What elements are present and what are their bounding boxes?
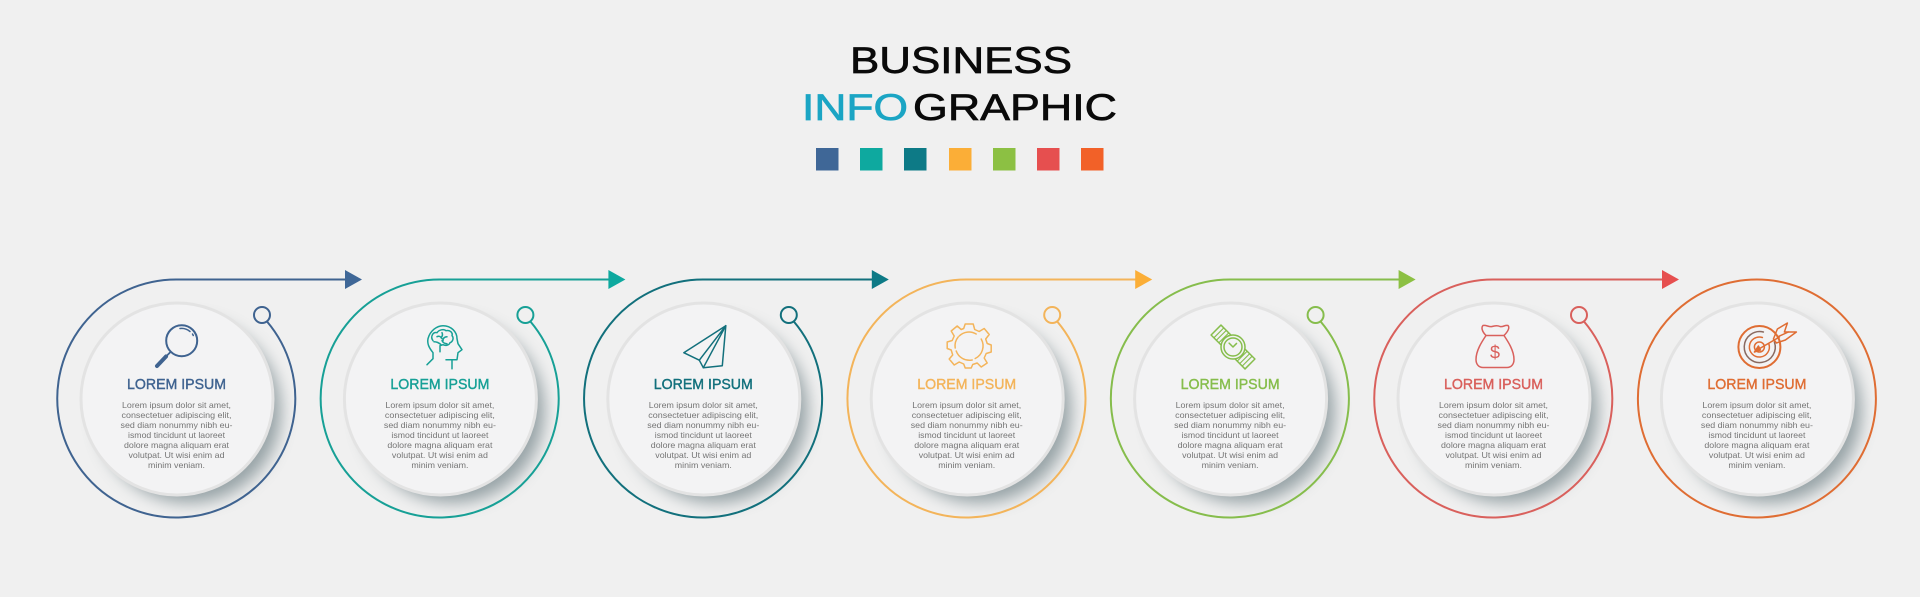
body text: volutpat. Ut wisi enim ad bbox=[655, 450, 752, 460]
body text: volutpat. Ut wisi enim ad bbox=[1709, 450, 1805, 460]
disc shadow bbox=[1677, 319, 1861, 503]
body text: volutpat. Ut wisi enim ad bbox=[919, 450, 1015, 460]
connector node bbox=[1308, 307, 1324, 323]
body text bbox=[647, 400, 760, 470]
body text: Lorem ipsum dolor sit amet, bbox=[122, 400, 231, 410]
body text: minim veniam. bbox=[938, 460, 995, 470]
disc shadow bbox=[887, 319, 1071, 503]
panel: step 4 bbox=[847, 270, 1152, 517]
title line: BUSINESS: BUSINESS bbox=[850, 39, 1072, 81]
body text: dolore magna aliquam erat bbox=[387, 440, 493, 450]
body text: consectetuer adipiscing elit, bbox=[1702, 410, 1812, 420]
body text: sed diam nonummy nibh eu- bbox=[1701, 420, 1813, 430]
panel: step 3 bbox=[584, 270, 889, 517]
title word: INFO: INFO bbox=[802, 86, 908, 128]
body text bbox=[1174, 400, 1286, 470]
panel: step 7 bbox=[1638, 280, 1876, 518]
ring with arrow line bbox=[1111, 279, 1400, 517]
heading: LOREM IPSUM bbox=[654, 377, 753, 393]
body text: ismod tincidunt ut laoreet bbox=[1708, 430, 1806, 440]
heading: LOREM IPSUM bbox=[390, 377, 489, 393]
heading: LOREM IPSUM bbox=[917, 377, 1016, 393]
connector node bbox=[517, 307, 533, 323]
icon: money bag bbox=[1476, 325, 1514, 368]
body text: minim veniam. bbox=[1202, 460, 1259, 470]
connector node bbox=[1571, 307, 1587, 323]
body text: sed diam nonummy nibh eu- bbox=[911, 420, 1023, 430]
body text bbox=[1438, 400, 1550, 470]
title word: GRAPHIC: GRAPHIC bbox=[913, 86, 1117, 128]
ring with arrow line bbox=[1374, 279, 1663, 517]
body text: minim veniam. bbox=[411, 460, 468, 470]
disc shadow bbox=[624, 319, 808, 503]
closed ring bbox=[1638, 280, 1876, 518]
icon: target with arrow bbox=[1738, 323, 1796, 368]
heading: LOREM IPSUM bbox=[127, 377, 226, 393]
panel: step 6 bbox=[1374, 270, 1679, 517]
panel: step 2 bbox=[321, 270, 625, 517]
body text: sed diam nonummy nibh eu- bbox=[120, 420, 233, 430]
body text: minim veniam. bbox=[675, 460, 732, 470]
icon: gear bbox=[947, 324, 991, 368]
heading: LOREM IPSUM bbox=[1181, 377, 1280, 393]
icon: head with brain bbox=[427, 326, 462, 369]
inner disc bbox=[81, 303, 273, 495]
arrowhead bbox=[1399, 270, 1416, 289]
arrowhead bbox=[1135, 270, 1152, 289]
disc shadow bbox=[97, 319, 281, 503]
ring with arrow line bbox=[847, 279, 1136, 517]
body text: consectetuer adipiscing elit, bbox=[912, 410, 1022, 420]
body text: Lorem ipsum dolor sit amet, bbox=[1176, 400, 1285, 410]
disc shadow bbox=[360, 319, 544, 503]
arrowhead bbox=[345, 270, 362, 289]
panel: step 5 bbox=[1111, 270, 1416, 517]
icon: wristwatch bbox=[1208, 322, 1258, 372]
body text: sed diam nonummy nibh eu- bbox=[384, 420, 496, 430]
inner disc bbox=[1398, 303, 1590, 495]
body text: volutpat. Ut wisi enim ad bbox=[128, 450, 225, 460]
heading: LOREM IPSUM bbox=[1707, 377, 1806, 393]
inner disc bbox=[608, 303, 800, 495]
body text bbox=[384, 400, 496, 470]
body text bbox=[911, 400, 1023, 470]
body text: consectetuer adipiscing elit, bbox=[122, 410, 232, 420]
heading: LOREM IPSUM bbox=[1444, 377, 1543, 393]
connector node bbox=[781, 307, 797, 323]
body text: minim veniam. bbox=[1728, 460, 1785, 470]
body text: dolore magna aliquam erat bbox=[914, 440, 1020, 450]
connector node bbox=[254, 307, 270, 323]
body text: Lorem ipsum dolor sit amet, bbox=[385, 400, 494, 410]
body text: ismod tincidunt ut laoreet bbox=[1445, 430, 1543, 440]
body text: Lorem ipsum dolor sit amet, bbox=[1439, 400, 1548, 410]
inner disc bbox=[871, 303, 1063, 495]
ring with arrow line bbox=[57, 279, 346, 517]
body text: volutpat. Ut wisi enim ad bbox=[1446, 450, 1542, 460]
body text: volutpat. Ut wisi enim ad bbox=[1182, 450, 1279, 460]
body text: dolore magna aliquam erat bbox=[651, 440, 757, 450]
panel: step 1 bbox=[57, 270, 362, 517]
inner disc bbox=[1661, 303, 1853, 495]
arrowhead bbox=[608, 270, 625, 289]
body text: Lorem ipsum dolor sit amet, bbox=[912, 400, 1021, 410]
ring with arrow line bbox=[584, 279, 873, 517]
body text bbox=[1701, 400, 1813, 470]
connector node bbox=[1044, 307, 1060, 323]
body text: volutpat. Ut wisi enim ad bbox=[392, 450, 488, 460]
body text bbox=[120, 400, 233, 470]
body text: ismod tincidunt ut laoreet bbox=[655, 430, 753, 440]
arrowhead bbox=[872, 270, 889, 289]
body text: ismod tincidunt ut laoreet bbox=[1182, 430, 1279, 440]
title bbox=[802, 39, 1117, 128]
colour swatches bbox=[816, 148, 1104, 170]
body text: consectetuer adipiscing elit, bbox=[1438, 410, 1548, 420]
body text: dolore magna aliquam erat bbox=[1178, 440, 1283, 450]
body text: sed diam nonummy nibh eu- bbox=[1438, 420, 1550, 430]
body text: ismod tincidunt ut laoreet bbox=[128, 430, 226, 440]
disc shadow bbox=[1414, 319, 1598, 503]
inner disc bbox=[344, 303, 536, 495]
body text: sed diam nonummy nibh eu- bbox=[647, 420, 760, 430]
ring with arrow line bbox=[321, 279, 609, 517]
body text: Lorem ipsum dolor sit amet, bbox=[1702, 400, 1811, 410]
body text: sed diam nonummy nibh eu- bbox=[1174, 420, 1286, 430]
body text: consectetuer adipiscing elit, bbox=[385, 410, 495, 420]
body text: ismod tincidunt ut laoreet bbox=[391, 430, 489, 440]
body text: dolore magna aliquam erat bbox=[1441, 440, 1547, 450]
inner disc bbox=[1135, 303, 1327, 495]
arrowhead bbox=[1662, 270, 1679, 289]
body text: Lorem ipsum dolor sit amet, bbox=[649, 400, 758, 410]
body text: consectetuer adipiscing elit, bbox=[648, 410, 758, 420]
icon: money bag: $ bbox=[1490, 342, 1500, 362]
disc shadow bbox=[1151, 319, 1335, 503]
body text: minim veniam. bbox=[148, 460, 205, 470]
body text: dolore magna aliquam erat bbox=[1704, 440, 1810, 450]
icon: magnifying glass bbox=[157, 325, 197, 366]
icon: paper plane bbox=[684, 326, 726, 368]
body text: dolore magna aliquam erat bbox=[124, 440, 230, 450]
body text: minim veniam. bbox=[1465, 460, 1522, 470]
body text: consectetuer adipiscing elit, bbox=[1175, 410, 1285, 420]
body text: ismod tincidunt ut laoreet bbox=[918, 430, 1016, 440]
